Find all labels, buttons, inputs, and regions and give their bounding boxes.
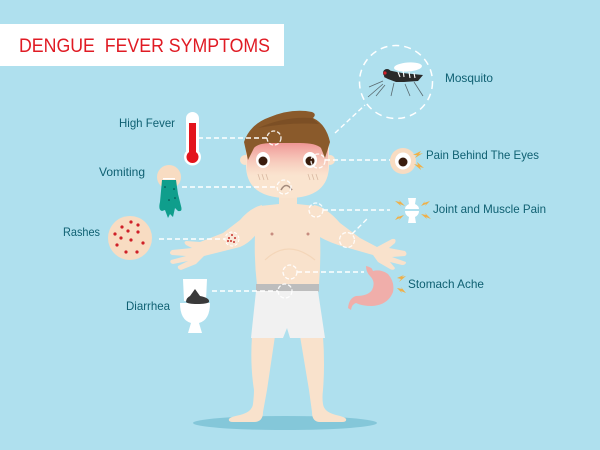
icon: joint xyxy=(395,198,431,223)
label: vomiting: Vomiting xyxy=(99,165,145,179)
icon: toilet xyxy=(180,279,210,333)
icon: rash skin circle xyxy=(108,216,152,260)
ground shadow xyxy=(193,416,377,430)
label: diarrhea: Diarrhea xyxy=(126,299,170,313)
label: joint and muscle pain: Joint and Muscle Pain xyxy=(433,202,546,216)
shorts xyxy=(251,291,325,338)
label: mosquito: Mosquito xyxy=(445,71,493,85)
title banner xyxy=(0,24,284,66)
legs xyxy=(229,336,275,422)
belt xyxy=(256,284,319,292)
icon: stomach xyxy=(348,266,406,310)
torso xyxy=(255,195,320,285)
icon: thermometer xyxy=(184,112,201,166)
icon: painful eye xyxy=(390,148,424,174)
ears xyxy=(240,155,250,165)
title banner: DENGUE FEVER SYMPTOMS xyxy=(19,35,270,57)
mouth xyxy=(281,186,292,190)
arms and hands xyxy=(170,205,262,270)
label: rashes: Rashes xyxy=(63,225,100,239)
icon: mosquito xyxy=(360,46,432,118)
face xyxy=(246,140,329,198)
cheeks xyxy=(258,174,318,180)
label: pain behind the eyes: Pain Behind The Eyes xyxy=(426,148,539,162)
eyes xyxy=(256,152,270,168)
leader lines and markers xyxy=(159,105,390,298)
hair xyxy=(244,111,330,160)
icon: vomiting xyxy=(157,165,182,218)
label: stomach ache: Stomach Ache xyxy=(408,277,484,291)
arm rash spot xyxy=(225,232,239,246)
figure: man xyxy=(170,111,406,430)
label: high fever: High Fever xyxy=(119,116,175,130)
